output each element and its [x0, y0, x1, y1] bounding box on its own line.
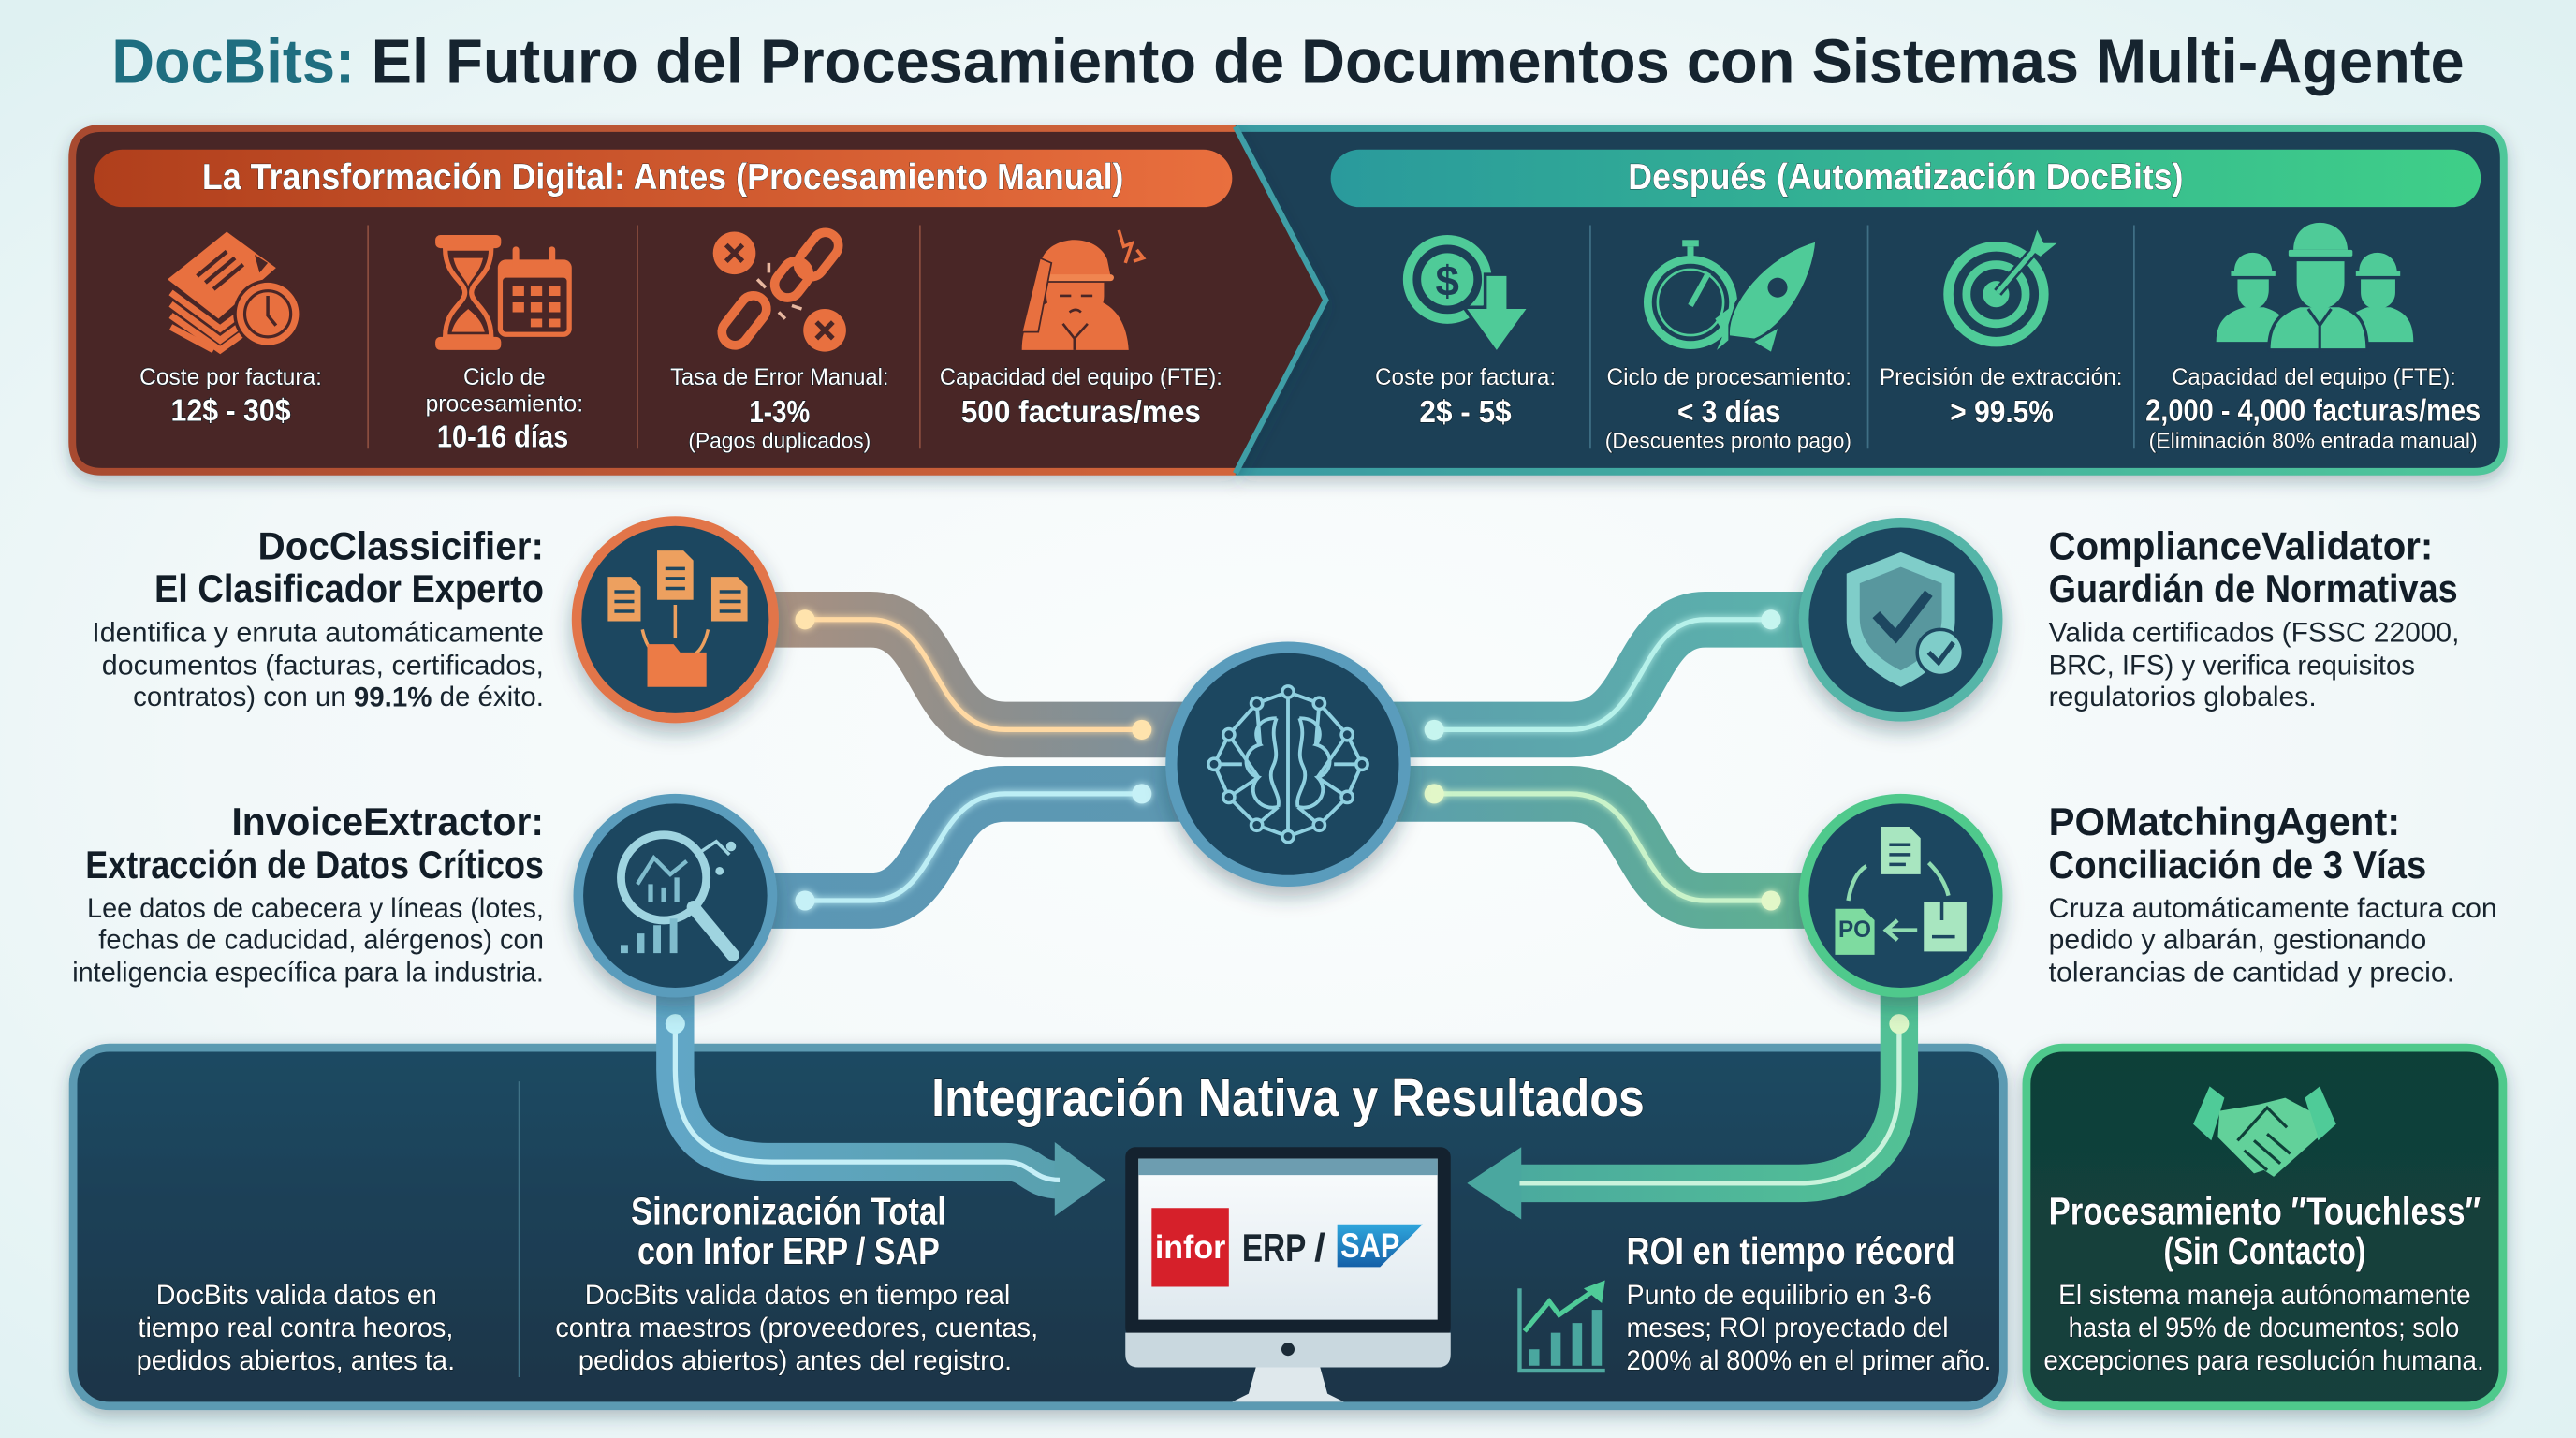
panel: después (automatización DocBits) [1236, 125, 2507, 475]
icon: coin with down arrow [1408, 240, 1526, 350]
icon: target with arrow [1949, 230, 2056, 342]
agent text: DocClassicifier: El Clasificador Experto [154, 566, 544, 610]
panel: procesamiento touchless [2027, 1048, 2503, 1406]
agent text: InvoiceExtractor: InvoiceExtractor: [231, 800, 544, 844]
icon: hourglass and calendar [435, 235, 572, 350]
agent text: InvoiceExtractor: inteligencia específica para la industria. [72, 958, 544, 989]
metric: coste por factura (antes): Coste por factura: [139, 365, 322, 390]
agent text: POMatchingAgent: POMatchingAgent: [2049, 800, 2400, 844]
agent text: DocClassicifier: documentos (facturas, certificados, [102, 650, 544, 681]
text block: sincronización total: DocBits valida datos en tiempo real [585, 1280, 1010, 1311]
metric: ciclo de procesamiento (antes) [426, 365, 583, 454]
text block: validación (izquierda) [137, 1280, 455, 1376]
agent text: ComplianceValidator: Valida certificados (FSSC 22000, [2049, 617, 2459, 648]
agent text: InvoiceExtractor: Extracción de Datos Críticos [85, 843, 544, 887]
arrow: InvoiceExtractor to ERP [666, 994, 1105, 1216]
metric: precisión de extracción: Precisión de extracción: [1880, 365, 2123, 390]
metric: coste por factura (después) [1375, 365, 1556, 430]
text block: touchless: El sistema maneja autónomamente [2058, 1280, 2471, 1311]
arrow: POMatchingAgent to ERP [1467, 994, 1909, 1220]
agent text: ComplianceValidator: Guardián de Normativas [2049, 566, 2458, 610]
agent text: ComplianceValidator: ComplianceValidator: [2049, 523, 2433, 567]
metric: capacidad del equipo (antes): Capacidad del equipo (FTE): [940, 365, 1222, 390]
title: El Futuro del Procesamiento de Documentos con Sistemas Multi-Agente [372, 28, 2465, 97]
agent text: DocClassicifier: DocClassicifier: [258, 523, 544, 567]
metric: tasa de error manual: (Pagos duplicados) [688, 428, 871, 452]
text block: validación (izquierda): DocBits valida datos en [156, 1280, 437, 1311]
metric: ciclo de procesamiento (después): < 3 días [1677, 395, 1781, 430]
agent text: ComplianceValidator: BRC, IFS) y verifica requisitos [2049, 650, 2415, 681]
logo: infor [1151, 1208, 1229, 1287]
icon: stacked invoices and clock [168, 232, 302, 350]
agent node: DocClassifier [577, 521, 774, 718]
icon: stressed worker [1022, 230, 1144, 350]
agent text: POMatchingAgent: Cruza automáticamente factura con [2049, 893, 2497, 924]
metric: ciclo de procesamiento (antes): procesamiento: [426, 391, 583, 417]
metric: tasa de error manual: Tasa de Error Manual: [670, 365, 889, 390]
label: ERP: ERP [1242, 1225, 1306, 1269]
text block: touchless: excepciones para resolución humana. [2043, 1345, 2484, 1376]
text block: sincronización total: Sincronización Total [631, 1190, 946, 1233]
separator slash: / [1314, 1225, 1325, 1269]
metric: coste por factura (antes) [139, 365, 322, 428]
text block: sincronización total [555, 1190, 1038, 1376]
text block: ROI: Punto de equilibrio en 3-6 [1627, 1280, 1932, 1311]
panel: antes (procesamiento manual) [69, 125, 1327, 475]
agent text: ComplianceValidator: regulatorios globales. [2049, 682, 2317, 712]
metric: precisión de extracción [1880, 365, 2123, 430]
connectors: agents to central brain [764, 609, 1812, 911]
panel: antes y después [69, 125, 2507, 475]
heading pill: después [1331, 150, 2481, 207]
metric: capacidad del equipo (antes) [940, 365, 1222, 430]
text block: touchless: hasta el 95% de documentos; solo [2069, 1313, 2459, 1343]
agent text: InvoiceExtractor: fechas de caducidad, alérgenos) con [98, 925, 544, 956]
text block: ROI: ROI en tiempo récord [1627, 1229, 1955, 1272]
metric: coste por factura (después): Coste por factura: [1375, 365, 1556, 390]
metric: coste por factura (después): 2$ - 5$ [1419, 395, 1512, 430]
icon: ROI growth chart [1519, 1280, 1605, 1371]
agent text: POMatchingAgent [2049, 800, 2497, 989]
text block: touchless [2043, 1190, 2484, 1376]
agent text: POMatchingAgent: Conciliación de 3 Vías [2049, 843, 2426, 887]
icon: broken chain [713, 227, 846, 352]
agent text: InvoiceExtractor: Lee datos de cabecera y líneas (lotes, [87, 893, 544, 924]
icon: team of three workers [2217, 223, 2413, 350]
text block: validación (izquierda): tiempo real contra heoros, [138, 1313, 453, 1343]
text block: ROI: meses; ROI proyectado del [1627, 1313, 1949, 1343]
agent node: POMatchingAgent [1804, 799, 1998, 992]
metric: precisión de extracción: > 99.5% [1950, 395, 2054, 430]
text block: sincronización total: contra maestros (proveedores, cuentas, [555, 1313, 1038, 1343]
agent node: ComplianceValidator [1804, 522, 1998, 716]
logo: infor: infor [1155, 1229, 1226, 1266]
heading: integración nativa: Integración Nativa y Resultados [931, 1068, 1645, 1127]
metric: capacidad del equipo (después): Capacidad del equipo (FTE): [2172, 365, 2456, 390]
metric: capacidad del equipo (antes): 500 facturas/mes [961, 395, 1201, 430]
text block: sincronización total: pedidos abiertos) antes del registro. [578, 1345, 1012, 1376]
agent node: InvoiceExtractor [578, 799, 772, 992]
icon: stopwatch and rocket [1647, 240, 1817, 352]
agent text: DocClassicifier [92, 523, 544, 712]
metric: ciclo de procesamiento (antes): Ciclo de [463, 365, 546, 390]
agent text: DocClassicifier: Identifica y enruta automáticamente [92, 617, 544, 648]
text block: ROI [1627, 1229, 1991, 1376]
metric: tasa de error manual [670, 365, 889, 452]
metric: capacidad del equipo (después): (Eliminación 80% entrada manual) [2149, 428, 2478, 452]
text block: touchless: (Sin Contacto) [2163, 1229, 2365, 1272]
logo: SAP: SAP [1340, 1226, 1399, 1265]
heading pill: después: Después (Automatización DocBits) [1628, 157, 2184, 198]
metric: capacidad del equipo (después) [2145, 365, 2481, 452]
agent text: ComplianceValidator [2049, 523, 2459, 712]
icon: monitor with ERP logos [1125, 1147, 1451, 1401]
text block: validación (izquierda): pedidos abiertos, antes ta. [137, 1345, 455, 1376]
heading pill: antes [94, 150, 1232, 207]
agent text: POMatchingAgent: pedido y albarán, gestionando [2049, 925, 2426, 956]
heading pill: antes: La Transformación Digital: Antes (Procesamiento Manual) [202, 157, 1123, 198]
metric: coste por factura (antes): 12$ - 30$ [171, 393, 291, 428]
central node: brain network [1171, 648, 1405, 881]
metric: tasa de error manual: 1-3% [749, 395, 810, 430]
agent text: POMatchingAgent: tolerancias de cantidad y precio. [2049, 958, 2454, 989]
metric: ciclo de procesamiento (después) [1605, 365, 1852, 452]
title: DocBits: [111, 28, 355, 97]
panel: integración nativa y resultados [73, 994, 2003, 1406]
text block: touchless: Procesamiento ″Touchless″ [2049, 1190, 2481, 1233]
metric: ciclo de procesamiento (antes): 10-16 días [437, 419, 568, 454]
metric: ciclo de procesamiento (después): Ciclo de procesamiento: [1606, 365, 1852, 390]
text block: sincronización total: con Infor ERP / SAP [637, 1229, 940, 1272]
agent text: DocClassicifier: contratos) con un 99.1% de éxito. [133, 682, 544, 712]
metric: capacidad del equipo (después): 2,000 - 4,000 facturas/mes [2145, 393, 2481, 428]
metric: ciclo de procesamiento (después): (Descuentes pronto pago) [1605, 428, 1852, 452]
agent node: POMatchingAgent: PO [1838, 917, 1871, 943]
text block: ROI: 200% al 800% en el primer año. [1627, 1345, 1991, 1376]
icon: coin with down arrow: $ [1436, 257, 1459, 305]
agent text: InvoiceExtractor [72, 800, 544, 989]
icon: handshake [2193, 1086, 2336, 1177]
